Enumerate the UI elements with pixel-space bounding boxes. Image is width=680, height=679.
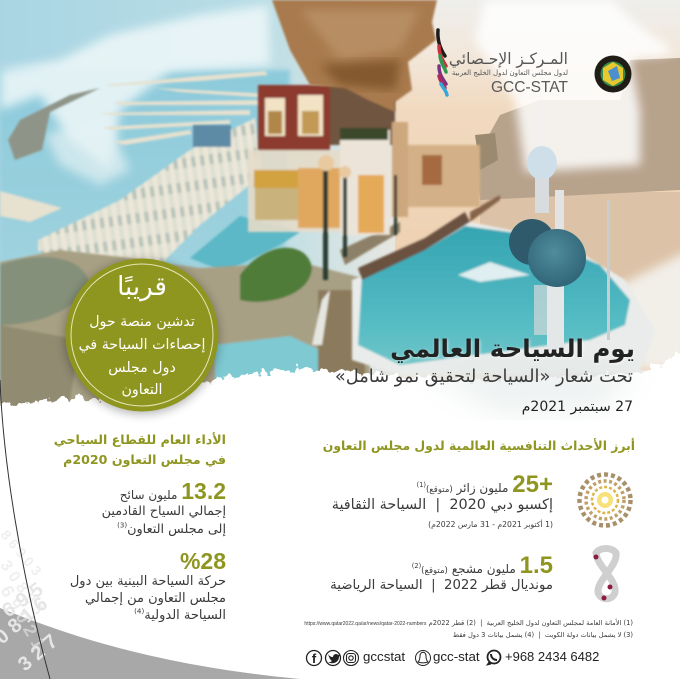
bottom grey swoosh with number texture: 3 2 7 xyxy=(14,630,62,676)
intra-GCC description line 2: مجلس التعاون من إجمالي xyxy=(85,591,226,606)
base sky xyxy=(0,0,680,400)
Expo event line: إكسبو دبي 2020 | السياحة الثقافية xyxy=(332,497,553,513)
phone number: +968 2434 6482 xyxy=(505,649,599,664)
28 percent number: %28 xyxy=(180,548,226,574)
Kuwait towers xyxy=(509,100,610,350)
social handle gccstat: gccstat xyxy=(363,649,405,664)
palm island xyxy=(0,71,272,222)
social icon: facebook xyxy=(306,650,322,666)
right sky and desert xyxy=(395,0,680,370)
canal water xyxy=(340,195,655,375)
grey splash under subtitle xyxy=(420,360,640,415)
footnote line 1: (1) الأمانة العامة لمجلس التعاون لدول الخليج العربية | (2) قطر 2022م https://www.qatar2022.qa/ar/news/qatar-2022-numbers xyxy=(304,619,633,627)
social icon: facebook: f xyxy=(312,651,317,666)
date: 27 سبتمبر 2021م xyxy=(522,399,633,415)
World Cup fans figure: 1.5 مليون مشجع (متوقع)(2) xyxy=(412,552,553,579)
left heading xyxy=(54,432,226,467)
thin black arc xyxy=(0,380,50,679)
tourists description line 2: إلى مجلس التعاون(3) xyxy=(117,521,226,537)
left trees and terrain xyxy=(0,248,370,430)
residential towers xyxy=(38,118,262,270)
tourists figure: 13.2 مليون سائح xyxy=(120,478,226,504)
Expo 2020 emblem xyxy=(580,474,630,526)
intra-GCC description line 3: السياحة الدولية(4) xyxy=(134,607,226,623)
intra-GCC description line 1: حركة السياحة البينية بين دول xyxy=(70,574,226,589)
circle line 3: دول مجلس xyxy=(108,360,176,376)
left heading line 2: في مجلس التعاون 2020م xyxy=(63,452,226,467)
social handle gcc-stat: gcc-stat xyxy=(433,649,480,664)
tourists description line 1: إجمالي السياح القادمين xyxy=(102,504,226,519)
torn white lower area xyxy=(0,345,680,679)
left heading line 1: الأداء العام للقطاع السياحي xyxy=(54,432,226,447)
Expo visitors figure: +25 مليون زائر (متوقع)(1) xyxy=(417,471,553,498)
circle line 2: إحصاءات السياحة في xyxy=(79,337,205,353)
small lagoon xyxy=(190,216,300,272)
right heading: أبرز الأحداث التنافسية العالمية لدول مجلس التعاون xyxy=(323,438,635,453)
Expo dates: (1 أكتوبر 2021م - 31 مارس 2022م) xyxy=(428,520,553,529)
left sea and clouds xyxy=(0,5,290,270)
GCC emblem xyxy=(594,56,632,92)
logo subtitle: لدول مجلس التعاون لدول الخليج العربية xyxy=(452,69,568,77)
rock overhang xyxy=(272,0,437,112)
circle body text xyxy=(79,314,205,398)
circle heading: قريبًا xyxy=(117,272,167,302)
logo colour ribbons xyxy=(438,30,447,95)
subtitle: تحت شعار «السياحة لتحقيق نمو شامل» xyxy=(335,366,633,387)
social icon: instagram xyxy=(344,650,358,666)
bottom grey swoosh with number texture xyxy=(0,527,300,679)
Qatar 2022 emblem xyxy=(594,548,616,600)
circle line 1: تدشين منصة حول xyxy=(89,314,195,330)
village building xyxy=(248,85,480,280)
main title: يوم السياحة العالمي xyxy=(390,334,635,363)
logo GCC-STAT: GCC-STAT xyxy=(491,79,568,96)
World Cup event line: مونديال قطر 2022 | السياحة الرياضية xyxy=(330,578,553,593)
footnote line 2: (3) لا يشمل بيانات دولة الكويت | (4) يشمل بيانات 3 دول فقط xyxy=(453,631,633,639)
olive announcement circle xyxy=(65,258,219,414)
circle line 4: التعاون xyxy=(122,382,162,398)
logo Arabic name: المـركـز الإحـصائي xyxy=(449,50,568,68)
social icon: twitter xyxy=(326,650,340,666)
social icon: snapchat xyxy=(416,650,430,666)
social icon: whatsapp xyxy=(487,650,500,665)
